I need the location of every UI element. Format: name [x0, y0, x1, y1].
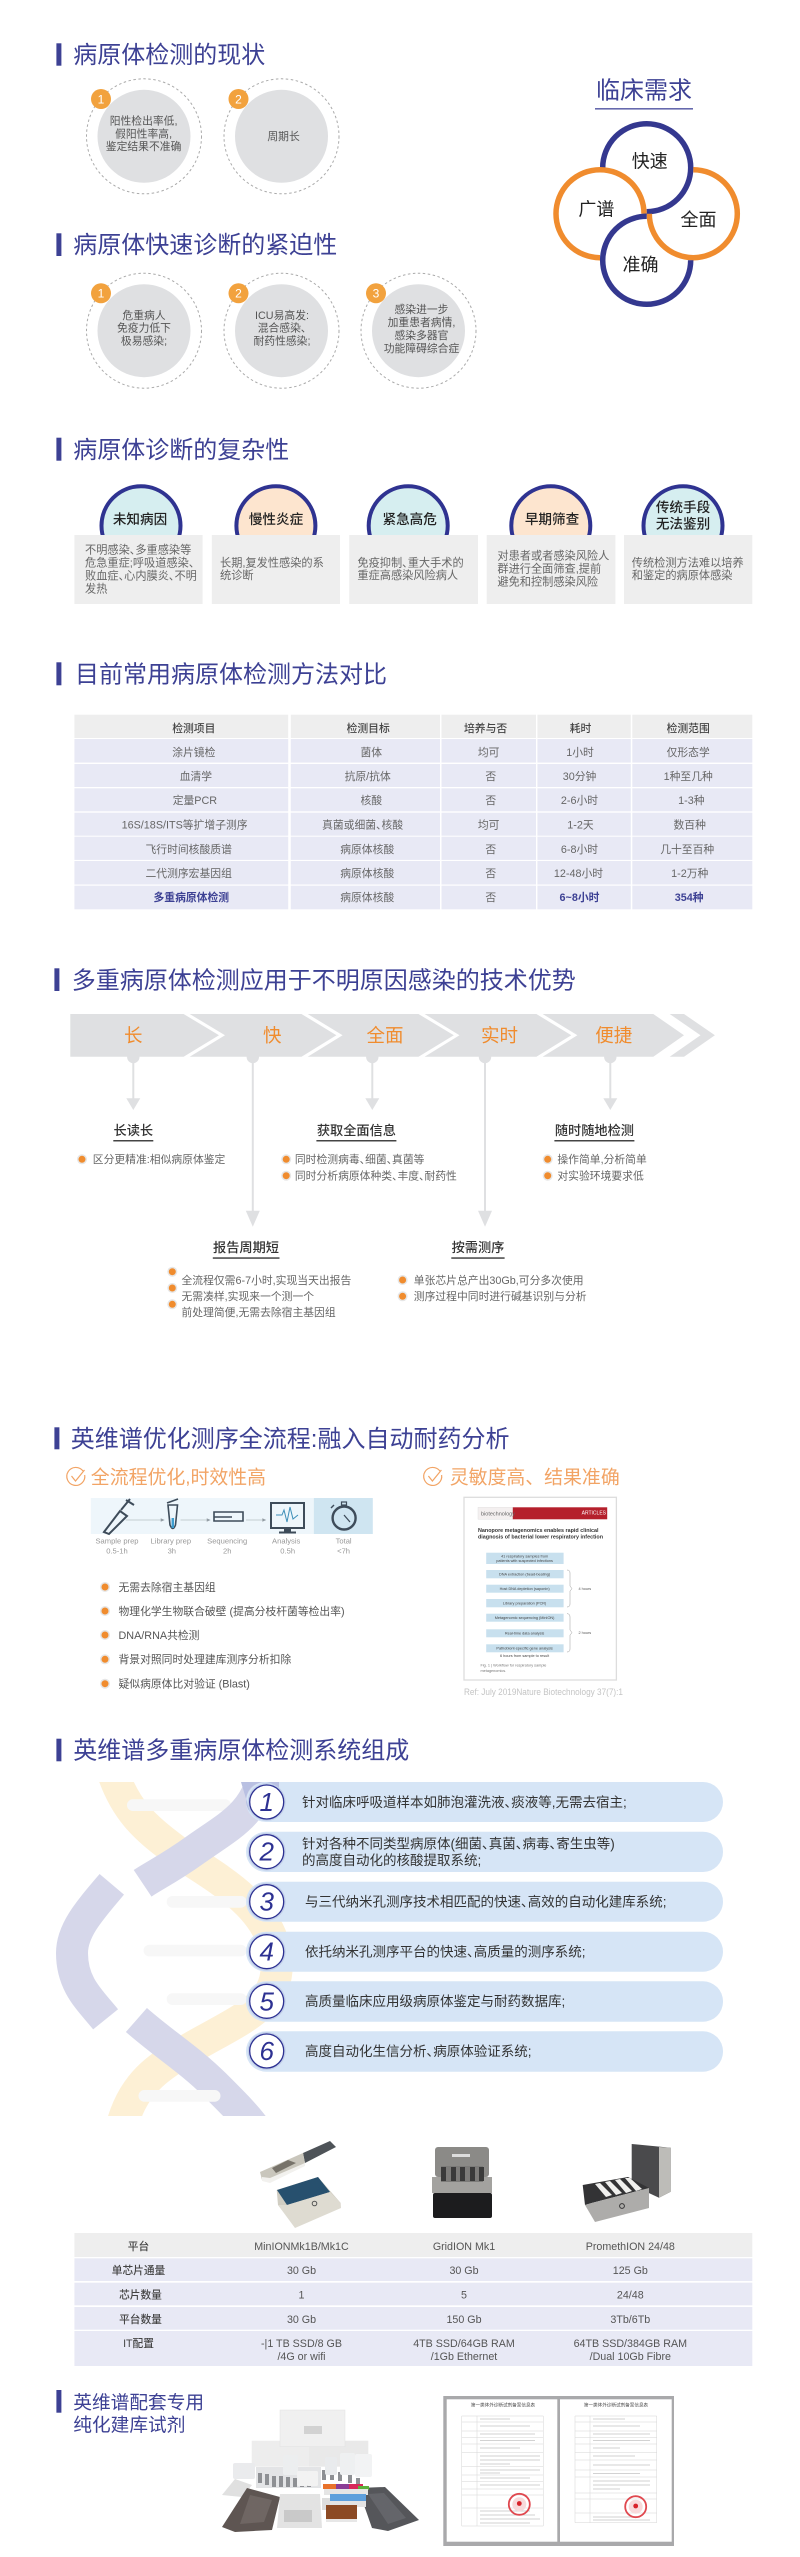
block: 报告周期短 [167, 1240, 351, 1319]
flow boxes: DNA extraction (bead-beating) [499, 1572, 551, 1576]
arrow: 快 [246, 1051, 260, 1227]
block: 长读长: 长读长 [114, 1122, 153, 1138]
header row: MinIONMk1B/Mk1C [254, 2241, 349, 2253]
table cells: 2-6小时 [561, 794, 598, 807]
circle 1: 假阳性率高, [115, 126, 172, 140]
paper title: diagnosis of bacterial lower respiratory infection [478, 1535, 604, 1541]
table: detection method comparison [74, 715, 752, 909]
photo: reagent kit [222, 2410, 419, 2532]
block: 报告周期短: 报告周期短 [213, 1240, 279, 1255]
DNA helix background [72, 1770, 277, 2130]
data rows: 30 Gb [449, 2265, 479, 2277]
device: GridION [432, 2147, 492, 2218]
circle 3 [361, 273, 476, 388]
flow boxes: 41 respiratory samples from [501, 1554, 548, 1558]
table header: 耗时 [570, 721, 591, 735]
card: 未知病因: 未知病因 [113, 511, 167, 527]
panel: urgency circles [86, 273, 476, 388]
flow boxes: Host DNA depletion (saponin) [500, 1587, 550, 1591]
photo: filing certificates [443, 2396, 674, 2546]
flow boxes: Metagenomic sequencing (MinION) [495, 1616, 555, 1620]
flow boxes: 4 hours [578, 1587, 591, 1591]
ring labels [578, 152, 716, 275]
block: 长读长: 区分更精准:相似病原体鉴定 [93, 1152, 226, 1166]
header row: GridION Mk1 [433, 2241, 495, 2253]
paper figure [464, 1497, 616, 1680]
block: 随时随地检测 [543, 1122, 647, 1182]
workflow labels: 2h [223, 1547, 231, 1556]
certificate page right: 第一类体外诊断试剂备案信息表 [584, 2402, 649, 2409]
table cells: 否 [485, 868, 496, 880]
arrow: 长 [126, 1051, 140, 1110]
workflow labels: 0.5h [280, 1547, 295, 1556]
subheading: 灵敏度高、结果准确: 灵敏度高、结果准确 [450, 1466, 620, 1488]
card: 早期筛查: 群进行全面筛查,提前 [497, 562, 601, 576]
table cells: 16S/18S/ITS等扩增子测序 [122, 818, 248, 832]
data rows: 4TB SSD/64GB RAM [413, 2338, 515, 2350]
circle 1: 危重病人 [122, 308, 166, 322]
table cells: 菌体 [361, 745, 382, 759]
item 5: 高质量临床应用级病原体鉴定与耐药数据库; [305, 1993, 565, 2009]
table header: 检测项目 [172, 721, 215, 735]
table cells: 6-8小时 [561, 843, 598, 856]
circle 2: 周期长 [267, 130, 300, 143]
bullet list: workflow benefits: DNA/RNA共检测 [118, 1628, 200, 1642]
table cells: 否 [485, 844, 496, 856]
block: 长读长 [77, 1122, 226, 1166]
header row: 平台 [128, 2240, 149, 2253]
card: 未知病因: 败血症、心内膜炎、不明 [85, 568, 197, 582]
table cells: 定量PCR [173, 793, 217, 807]
heading: 病原体快速诊断的紧迫性: 病原体快速诊断的紧迫性 [73, 232, 337, 259]
data rows: 30 Gb [287, 2314, 316, 2326]
card: 未知病因: 发热 [85, 581, 107, 595]
circle 2: 2 [235, 287, 242, 301]
card: 传统手段无法鉴别: 传统检测方法难以培养 [632, 555, 744, 569]
card: 慢性炎症: 统诊断 [220, 568, 254, 582]
circle 2: 混合感染、 [258, 321, 306, 335]
bottles and tubes [222, 2453, 372, 2497]
item 1: 针对临床呼吸道样本如肺泡灌洗液、痰液等,无需去宿主; [302, 1794, 627, 1810]
item 5: 5 [259, 1986, 274, 2016]
journal header: biotechnology [481, 1512, 515, 1518]
circle 1: 免疫力低下 [117, 321, 171, 335]
workflow labels: Sample prep [95, 1537, 139, 1546]
table cells: 真菌或细菌、核酸 [322, 818, 403, 832]
item 4: 依托纳米孔测序平台的快速、高质量的测序系统; [305, 1944, 586, 1960]
ring labels: 快速 [632, 152, 668, 172]
heading: 病原体诊断的复杂性: 病原体诊断的复杂性 [73, 437, 289, 464]
table cells: 30分钟 [563, 769, 597, 783]
circle 3: 感染多器官 [395, 328, 448, 342]
card: 早期筛查 [487, 486, 615, 604]
table body [74, 739, 752, 909]
table header: 检测目标 [347, 721, 390, 735]
heading: 英维谱配套专用纯化建库试剂: 纯化建库试剂 [73, 2415, 185, 2436]
chevrons [70, 1014, 715, 1057]
flow boxes: Library preparation (PCR) [503, 1602, 547, 1606]
circle 3: 3 [373, 287, 380, 301]
panel: complexity cards [74, 486, 752, 604]
circle 1 [86, 273, 202, 388]
card: 早期筛查: 早期筛查 [525, 511, 580, 527]
data rows: -|1 TB SSD/8 GB [261, 2338, 342, 2350]
heading: 病原体检测的现状: 病原体检测的现状 [73, 42, 265, 69]
circle 3: 功能障碍综合症 [384, 341, 459, 355]
certificate page left: 第一类体外诊断试剂备案信息表 [471, 2402, 536, 2409]
item 5 [246, 1981, 723, 2022]
block: 获取全面信息 [281, 1122, 457, 1182]
journal header [478, 1507, 607, 1519]
table header [74, 715, 752, 738]
card: 传统手段无法鉴别 [624, 486, 752, 604]
paper title: Nanopore metagenomics enables rapid clinical [478, 1528, 599, 1534]
circle 1 [86, 79, 202, 194]
data rows: /Dual 10Gb Fibre [590, 2351, 671, 2363]
data rows: 24/48 [617, 2290, 644, 2302]
certificate page right [560, 2399, 672, 2542]
block: 随时随地检测: 随时随地检测 [555, 1122, 634, 1138]
card: 传统手段无法鉴别: 无法鉴别 [656, 516, 710, 531]
circle 2: 2 [235, 92, 242, 106]
card: 未知病因: 危急重症;呼吸道感染、 [85, 555, 194, 569]
reference note: Ref: July 2019Nature Biotechnology 37(7):1 [464, 1687, 623, 1697]
heading: 英维谱多重病原体检测系统组成: 英维谱多重病原体检测系统组成 [73, 1738, 409, 1765]
dark foil bags [222, 2487, 419, 2532]
data rows [112, 2264, 687, 2363]
circle 2: 耐药性感染; [254, 334, 310, 348]
item 1: 1 [259, 1787, 274, 1817]
block: 报告周期短: 全流程仅需6-7小时,实现当天出报告 [182, 1273, 351, 1287]
card: 未知病因: 不明感染、多重感染等 [85, 542, 191, 556]
ring labels: 广谱 [578, 200, 614, 220]
flow boxes: Real-time data analysis [505, 1632, 544, 1636]
table cells: 抗原/抗体 [345, 769, 391, 783]
table cells: 病原体核酸 [340, 842, 394, 856]
boxes [252, 2410, 368, 2467]
icon: stopwatch [331, 1502, 356, 1530]
table cells: 均可 [478, 819, 500, 832]
card: 未知病因 [74, 486, 203, 604]
ring labels: 准确 [622, 255, 658, 275]
circle 1: 阳性检出率低, [110, 114, 177, 128]
card: 早期筛查: 避免和控制感染风险 [497, 575, 598, 589]
icon: sequencer [214, 1512, 243, 1521]
header row [128, 2240, 675, 2253]
data rows: 单芯片通量 [112, 2264, 166, 2277]
bullet list: workflow benefits [100, 1580, 345, 1691]
flow boxes: 6 hours from sample to result [500, 1654, 550, 1658]
block: 获取全面信息: 获取全面信息 [317, 1122, 396, 1138]
arrow: 全面 [365, 1051, 379, 1110]
table cells: 否 [485, 795, 496, 807]
data rows: 3Tb/6Tb [610, 2314, 650, 2326]
card: 紧急高危 [349, 486, 478, 604]
chevron labels [124, 1025, 632, 1046]
table cells: 数百种 [674, 818, 706, 832]
card: 紧急高危: 免疫抑制、重大手术的 [357, 555, 464, 569]
workflow labels: Total [336, 1537, 352, 1546]
circle 3: 加重患者病情, [388, 315, 455, 329]
workflow labels [95, 1537, 352, 1556]
heading: 目前常用病原体检测方法对比: 目前常用病原体检测方法对比 [75, 661, 387, 688]
arrow: 实时 [478, 1051, 492, 1227]
data rows: 平台数量 [119, 2313, 162, 2326]
data rows: 30 Gb [287, 2265, 316, 2277]
flow boxes: Pathobiont-specific gene analysis [496, 1647, 553, 1651]
card: 紧急高危: 重症高感染风险病人 [357, 568, 458, 582]
data rows: 125 Gb [613, 2265, 648, 2277]
panel: system components [241, 1782, 723, 2072]
colored reagent vials [322, 2484, 369, 2522]
item 2: 针对各种不同类型病原体(细菌、真菌、病毒、寄生虫等) [302, 1836, 615, 1852]
block: 获取全面信息: 同时检测病毒、细菌、真菌等 [295, 1152, 425, 1166]
flow boxes: metagenomics. [480, 1669, 506, 1673]
table cells: 12-48小时 [554, 867, 603, 880]
circle 1: 鉴定结果不准确 [106, 139, 181, 153]
item 2: 的高度自动化的核酸提取系统; [302, 1852, 481, 1868]
flow boxes: Fig. 1 | Workflow for respiratory sample [480, 1664, 546, 1668]
workflow diagram [91, 1498, 373, 1556]
icon: monitor [271, 1503, 304, 1534]
card: 慢性炎症: 慢性炎症 [249, 511, 304, 527]
chevron labels: 便捷 [595, 1025, 632, 1046]
table cells: 1小时 [566, 746, 594, 759]
block: 按需测序 [398, 1239, 587, 1303]
circle 2: ICU易高发: [255, 308, 309, 322]
circle 1: 1 [98, 287, 105, 301]
paper title [478, 1528, 604, 1541]
item 4 [246, 1932, 723, 1972]
data rows: 64TB SSD/384GB RAM [574, 2338, 687, 2350]
data rows: /4G or wifi [277, 2351, 326, 2363]
circle 1: 1 [98, 92, 105, 106]
table cells: 否 [485, 771, 496, 783]
table cells: 1-3种 [678, 793, 705, 807]
data rows: 150 Gb [446, 2314, 482, 2326]
table cells: 病原体核酸 [340, 866, 394, 880]
table cells: 血清学 [180, 769, 212, 783]
heading: 英维谱配套专用纯化建库试剂: 英维谱配套专用 [73, 2392, 204, 2413]
table cells: 否 [485, 892, 496, 904]
table cells: 二代测序宏基因组 [146, 866, 232, 880]
item 1 [241, 1782, 723, 1822]
card: 早期筛查: 对患者或者感染风险人 [497, 549, 609, 563]
block: 按需测序: 单张芯片总产出30Gb,可分多次使用 [414, 1273, 584, 1287]
workflow labels: Sequencing [207, 1537, 247, 1546]
chevron labels: 全面 [366, 1025, 404, 1046]
circle 3: 感染进一步 [395, 302, 449, 316]
workflow labels: Analysis [272, 1537, 301, 1546]
item 6: 高度自动化生信分析、病原体验证系统; [305, 2043, 532, 2059]
block: 报告周期短: 无需凑样,实现来一个测一个 [182, 1289, 314, 1303]
item 3 [246, 1882, 723, 1922]
circle 2 [224, 273, 339, 388]
table cells: 涂片镜检 [172, 745, 216, 759]
table cells: 几十至百种 [660, 842, 714, 856]
block: 获取全面信息: 同时分析病原体种类、丰度、耐药性 [295, 1168, 457, 1182]
item 6 [246, 2031, 723, 2072]
item 6: 6 [259, 2036, 274, 2066]
card: 慢性炎症 [212, 486, 340, 604]
workflow labels: Library prep [151, 1537, 191, 1546]
table cells: 核酸 [361, 793, 382, 807]
flow boxes: patients with suspected infections [496, 1559, 553, 1563]
block: 随时随地检测: 对实验环境要求低 [557, 1168, 644, 1182]
item 2: 2 [258, 1837, 274, 1867]
table cells: 病原体核酸 [340, 890, 394, 904]
workflow arrows [126, 1519, 266, 1521]
heading: 英维谱优化测序全流程: 英维谱优化测序全流程:融入自动耐药分析 [71, 1426, 509, 1453]
bullet list: workflow benefits: 无需去除宿主基因组 [118, 1580, 216, 1594]
table cells: 仅形态学 [667, 745, 710, 759]
bullet list: workflow benefits: 背景对照同时处理建库测序分析扣除 [118, 1652, 291, 1666]
item 4: 4 [259, 1937, 274, 1967]
flow boxes [480, 1553, 591, 1673]
table cells: 1-2万种 [671, 866, 709, 880]
table header: 培养与否 [464, 721, 507, 735]
icon: tube [167, 1499, 178, 1528]
table cells: 6~8小时 [560, 890, 600, 904]
table cells: 1种至几种 [664, 769, 713, 783]
journal header: ARTICLES [582, 1510, 607, 1516]
block: 按需测序: 按需测序 [452, 1239, 504, 1255]
data rows: 芯片数量 [119, 2289, 162, 2302]
chevron labels: 长 [124, 1025, 143, 1046]
table header: 检测范围 [667, 721, 710, 735]
device: PromethION [583, 2144, 671, 2222]
data rows: 1 [299, 2290, 305, 2302]
arrow: 便捷 [603, 1051, 617, 1110]
bullet list: workflow benefits: 物理化学生物联合破壁 (提高分枝杆菌等检出率) [118, 1604, 345, 1618]
icon: pipette [104, 1499, 134, 1534]
item 3: 3 [259, 1887, 274, 1917]
subheading: 全流程优化,时效性高: 全流程优化,时效性高 [91, 1466, 266, 1488]
bullet list: workflow benefits: 疑似病原体比对验证 (Blast) [118, 1677, 250, 1691]
circle 2 [224, 79, 339, 194]
flow boxes: 2 hours [578, 1631, 591, 1635]
certificate page left [447, 2399, 557, 2542]
block: 报告周期短: 前处理简便,无需去除宿主基因组 [182, 1305, 336, 1319]
panel: clinical needs [556, 78, 737, 304]
device: MinION [260, 2141, 341, 2228]
data rows: 5 [461, 2290, 467, 2302]
chevron banner [70, 1014, 715, 1057]
item 2 [246, 1832, 723, 1872]
table: platform comparison [74, 2233, 752, 2366]
circle 1: 极易感染; [121, 334, 167, 348]
block: 按需测序: 测序过程中同时进行碱基识别与分析 [414, 1289, 587, 1303]
heading: 英维谱配套专用纯化建库试剂 [56, 2390, 204, 2436]
white bag [277, 2494, 322, 2528]
card: 慢性炎症: 长期,复发性感染的系 [220, 555, 324, 569]
chevron labels: 实时 [481, 1025, 518, 1046]
card: 传统手段无法鉴别: 传统手段 [656, 499, 711, 515]
table cells: 均可 [478, 746, 500, 759]
table cells: 飞行时间核酸质谱 [146, 842, 232, 856]
ring labels: 全面 [680, 210, 716, 230]
card: 紧急高危: 紧急高危 [383, 511, 437, 527]
item 3: 与三代纳米孔测序技术相匹配的快速、高效的自动化建库系统; [305, 1894, 666, 1910]
heading: 多重病原体检测应用于不明原因感染的技术优势: 多重病原体检测应用于不明原因感染的技术优势 [72, 967, 576, 994]
workflow labels: 3h [168, 1547, 176, 1556]
heading: 临床需求: 临床需求 [596, 78, 692, 105]
workflow labels: 0.5-1h [106, 1547, 128, 1556]
data rows: /1Gb Ethernet [431, 2351, 497, 2363]
panel: current status circles [86, 79, 339, 194]
table cells [122, 745, 714, 904]
table cells: 1-2天 [567, 820, 594, 832]
header row: PromethION 24/48 [586, 2241, 675, 2253]
chevron labels: 快 [263, 1025, 282, 1046]
interlocking rings [556, 124, 737, 304]
card: 传统手段无法鉴别: 和鉴定的病原体感染 [632, 568, 733, 582]
table cells: 354种 [675, 890, 704, 904]
table cells: 多重病原体检测 [154, 890, 229, 904]
data rows: IT配置 [123, 2338, 154, 2350]
workflow labels: <7h [337, 1547, 350, 1556]
block: 随时随地检测: 操作简单,分析简单 [557, 1152, 647, 1166]
